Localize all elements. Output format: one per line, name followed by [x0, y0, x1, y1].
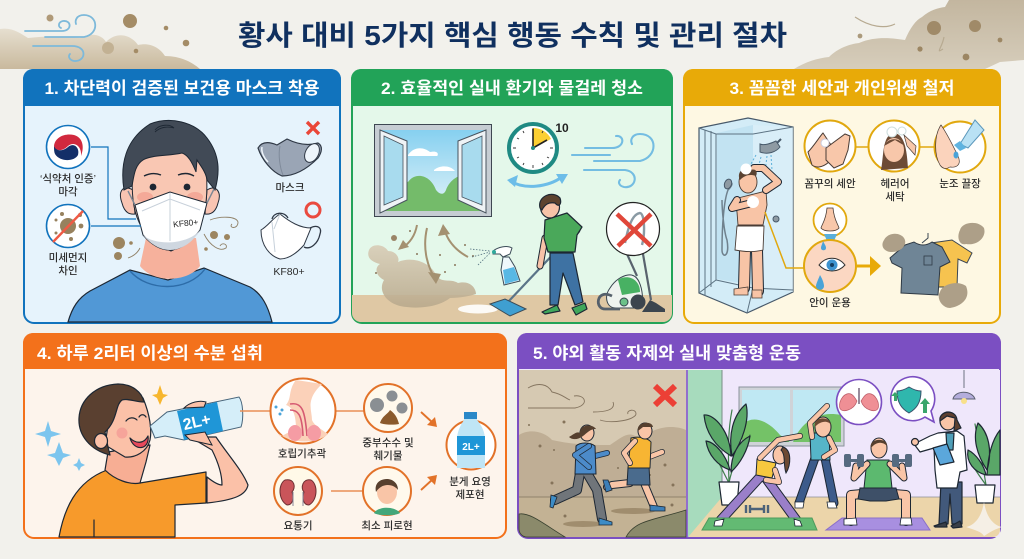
arrow heads	[507, 174, 568, 187]
label: KF80+: KF80+	[273, 266, 305, 278]
dumbbell on floor	[746, 505, 768, 513]
speech bubble: lungs	[836, 380, 882, 424]
person wearing KF80+ mask	[68, 120, 272, 322]
icon: face washing	[804, 120, 856, 172]
icon: eye drops	[934, 120, 986, 172]
heading 4: 4. 하루 2리터 이상의 수분 섭취	[37, 344, 263, 363]
water bottle 2L+	[150, 397, 243, 445]
label: 분게 요영	[449, 475, 491, 488]
dust label	[49, 252, 87, 277]
wind lines	[572, 134, 654, 187]
dust particles around the face	[113, 217, 238, 260]
heading 5: 5. 야외 활동 자제와 실내 맞춤형 운동	[533, 344, 801, 363]
man with dumbbells	[844, 438, 912, 525]
doctor	[912, 412, 967, 528]
label: 제포현	[456, 489, 484, 501]
indoor window	[739, 387, 844, 446]
icon: respiratory tract	[270, 378, 336, 444]
rotating arrow	[510, 177, 562, 186]
panel 1: mask	[23, 69, 341, 323]
runner man	[603, 423, 665, 511]
label: hair wash: 세탁	[885, 191, 905, 203]
showering man	[732, 164, 778, 298]
connector line	[765, 212, 810, 268]
sparkles	[35, 385, 168, 471]
cross mark	[307, 122, 319, 134]
stretching woman with teal top	[795, 406, 837, 508]
cross mark	[655, 386, 675, 405]
title: 황사 대비 5가지 핵심 행동 수칙 및 관리 절차	[238, 20, 787, 51]
feet on mats	[714, 519, 802, 526]
pendant lamp	[953, 370, 975, 404]
icon: eye wash	[804, 240, 856, 292]
shower booth	[699, 118, 793, 313]
label	[362, 437, 414, 462]
person mopping	[540, 194, 587, 315]
connector line	[240, 411, 365, 491]
panel 5: exercise	[517, 333, 1002, 538]
label: 요통기	[284, 520, 312, 532]
panel 3: hygiene	[683, 69, 1001, 323]
icon: dusty clothes	[882, 223, 985, 308]
icon: white KF80+ mask	[261, 213, 321, 259]
label: face wash: 꼼꾸의 세안	[804, 178, 856, 190]
seal label: ‘식약처 인증’	[40, 172, 96, 185]
icon: healthy face	[363, 467, 411, 515]
floor	[352, 295, 672, 322]
seal label: 마각	[58, 185, 78, 198]
icon: nose	[814, 204, 846, 241]
outdoor dusty scene	[519, 370, 686, 537]
plant left	[704, 404, 750, 505]
spray bottle	[470, 247, 520, 285]
seal label	[40, 172, 96, 198]
circle mark	[306, 203, 320, 217]
label: 호립기추곽	[278, 447, 326, 460]
icon: bottle in circle	[446, 412, 496, 470]
clock label: 10	[555, 121, 569, 135]
label: hair wash	[881, 177, 909, 203]
heading 2: 2. 효율적인 실내 환기와 물걸레 청소	[381, 79, 643, 98]
dust cloud top right	[794, 0, 1024, 69]
label: hair wash: 헤러어	[881, 177, 909, 190]
dust label: 미세먼지	[49, 252, 87, 264]
icon: hair washing	[868, 120, 920, 172]
mop spill	[458, 304, 498, 314]
label: mask: 마스크	[276, 182, 305, 194]
sparkle watermark	[966, 502, 1002, 536]
stretching woman with yellow top	[714, 436, 802, 526]
connector lines	[91, 147, 141, 226]
open window	[374, 124, 492, 216]
label: eye rinse: 안이 운용	[809, 297, 851, 309]
divider and indoor room	[687, 370, 1000, 537]
arrows	[421, 412, 437, 490]
panel 4: hydration	[23, 333, 507, 538]
icon: kidneys	[274, 467, 322, 515]
mask label: KF80+	[173, 217, 199, 229]
connector lines between circles	[856, 146, 934, 148]
plant right	[968, 423, 1000, 503]
icon: mucus and waste	[364, 384, 412, 432]
icon: fine dust blocked	[46, 204, 90, 248]
exercise mats	[702, 518, 930, 530]
label: eye drops: 눈조 끌장	[939, 178, 981, 190]
speech bubble: shield	[891, 377, 935, 422]
heading 1: 1. 차단력이 검증된 보건용 마스크 착용	[44, 79, 320, 98]
label on bottle: 2L+	[462, 442, 480, 453]
label: 최소 피로현	[361, 519, 413, 532]
mop	[490, 247, 560, 316]
bottle label: 2L+	[181, 411, 213, 434]
clock	[509, 121, 569, 172]
heading 3: 3. 꼼꼼한 세안과 개인위생 철저	[730, 79, 954, 98]
dust cloud top left	[0, 14, 200, 69]
vacuum with prohibited sign	[598, 202, 665, 312]
dust label: 차인	[58, 265, 78, 277]
icon: gray cloth mask	[258, 139, 322, 176]
label: 췌기물	[374, 450, 403, 462]
person drinking	[59, 384, 248, 537]
dust cloud with arrows	[368, 224, 476, 308]
icon: government seal	[46, 126, 90, 168]
label	[449, 475, 491, 501]
runner woman	[550, 425, 612, 525]
panel 2: ventilation	[351, 69, 673, 323]
label: 중부수수 및	[362, 437, 414, 449]
arrow	[857, 256, 881, 276]
